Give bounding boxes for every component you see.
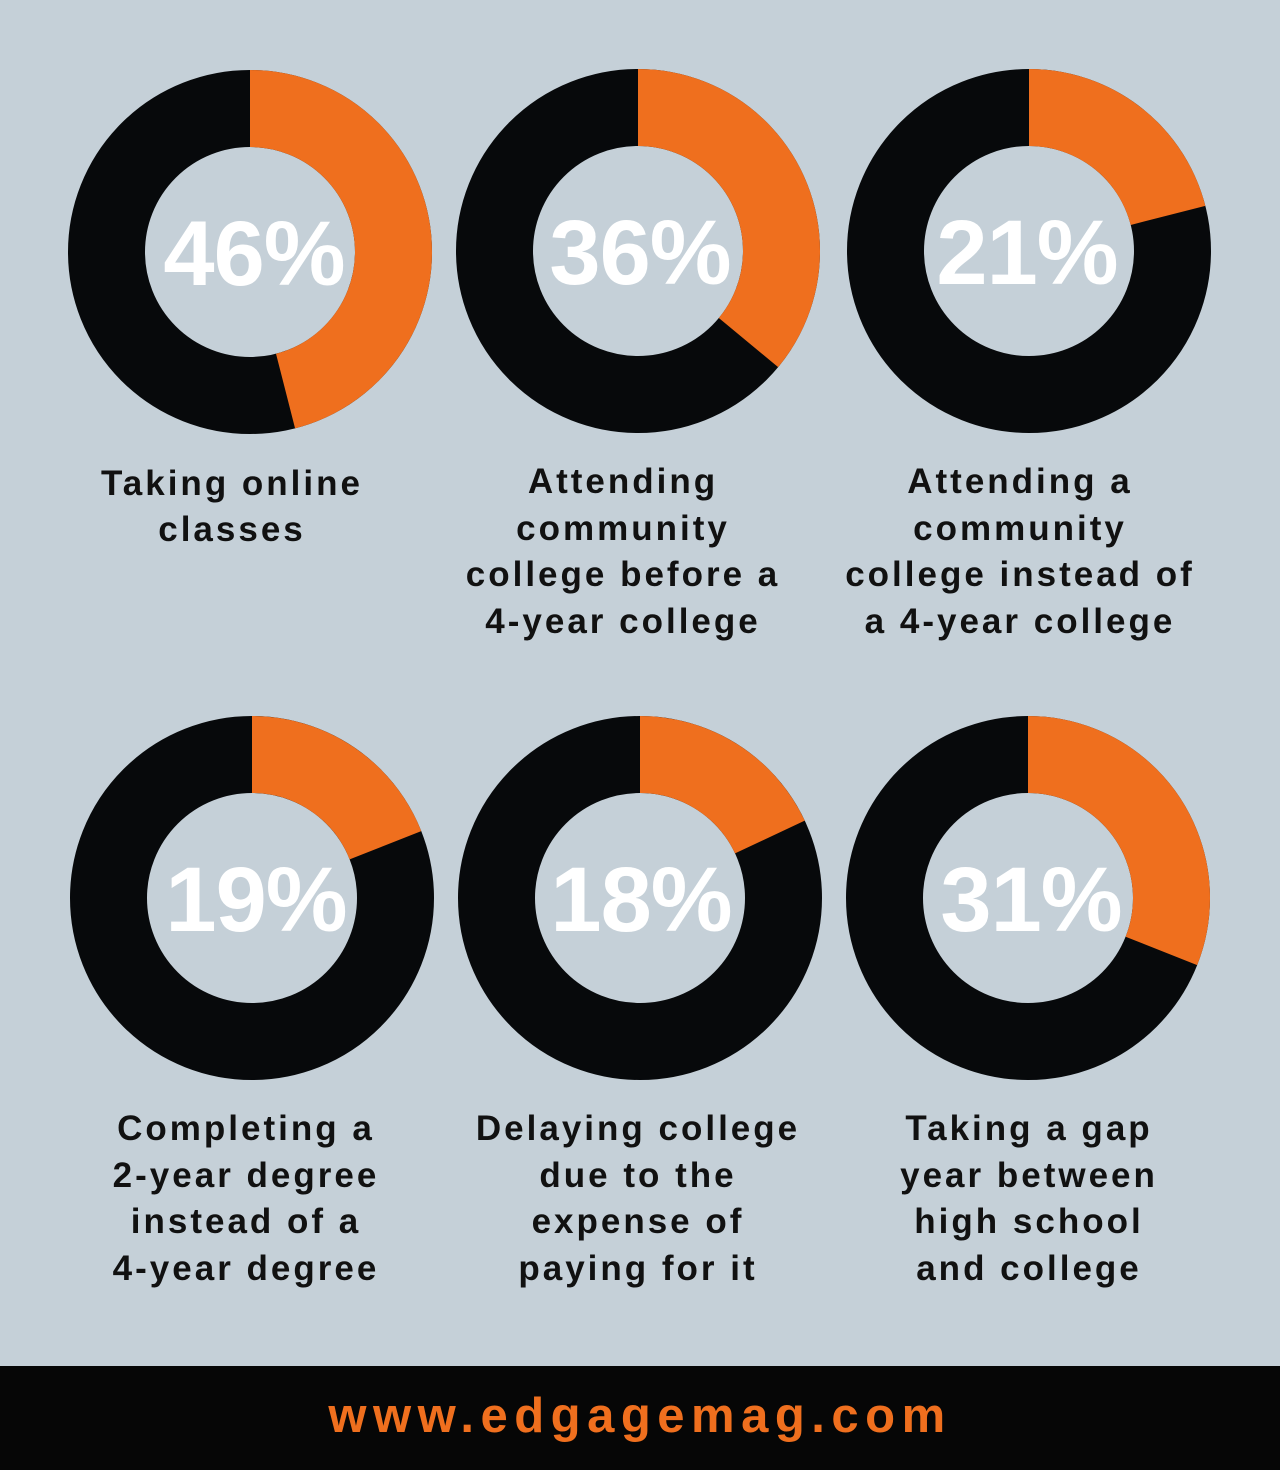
label: online classes: Taking online (101, 464, 363, 503)
label: 2-year degree: 2-year degree (113, 1156, 379, 1195)
donut: 36%: 36% (549, 202, 731, 304)
label: delaying college: paying for it (518, 1249, 758, 1288)
label: community instead: Attending a (907, 462, 1133, 501)
donut: 46% online classes (106, 108, 394, 396)
label: delaying college: due to the (539, 1156, 737, 1195)
label: delaying college: Delaying college (476, 1109, 800, 1148)
donut: 46% online classes: 46% (163, 203, 345, 305)
donut: 31%: 31% (940, 849, 1122, 951)
label: delaying college: expense of (532, 1202, 744, 1241)
label: community instead: a 4-year college (865, 602, 1175, 641)
label: gap year: year between (900, 1156, 1158, 1195)
label: online classes: classes (158, 510, 306, 549)
label: gap year: Taking a gap (905, 1109, 1153, 1148)
label: 2-year degree: Completing a (117, 1109, 375, 1148)
donut: 21%: 21% (936, 202, 1118, 304)
label: community before: 4-year college (485, 602, 761, 641)
donut: 18% (496, 754, 784, 1042)
donut: 36% (494, 108, 782, 394)
label: community before: community (516, 509, 730, 548)
label: community instead: community (913, 509, 1127, 548)
donut: 31% (884, 754, 1172, 1042)
footer: www.edgagemag.com (327, 1389, 952, 1443)
donut: 18%: 18% (550, 849, 732, 951)
donut: 21% (886, 108, 1172, 394)
donut: 19% (108, 754, 396, 1042)
donut: 19%: 19% (165, 849, 347, 951)
label: gap year: and college (916, 1249, 1142, 1288)
label: community instead: college instead of (845, 555, 1195, 594)
label: community before: college before a (466, 555, 780, 594)
label: 2-year degree: 4-year degree (113, 1249, 379, 1288)
footer (0, 1366, 1280, 1470)
label: 2-year degree: instead of a (131, 1202, 361, 1241)
label: community before: Attending (528, 462, 718, 501)
label: gap year: high school (914, 1202, 1144, 1241)
